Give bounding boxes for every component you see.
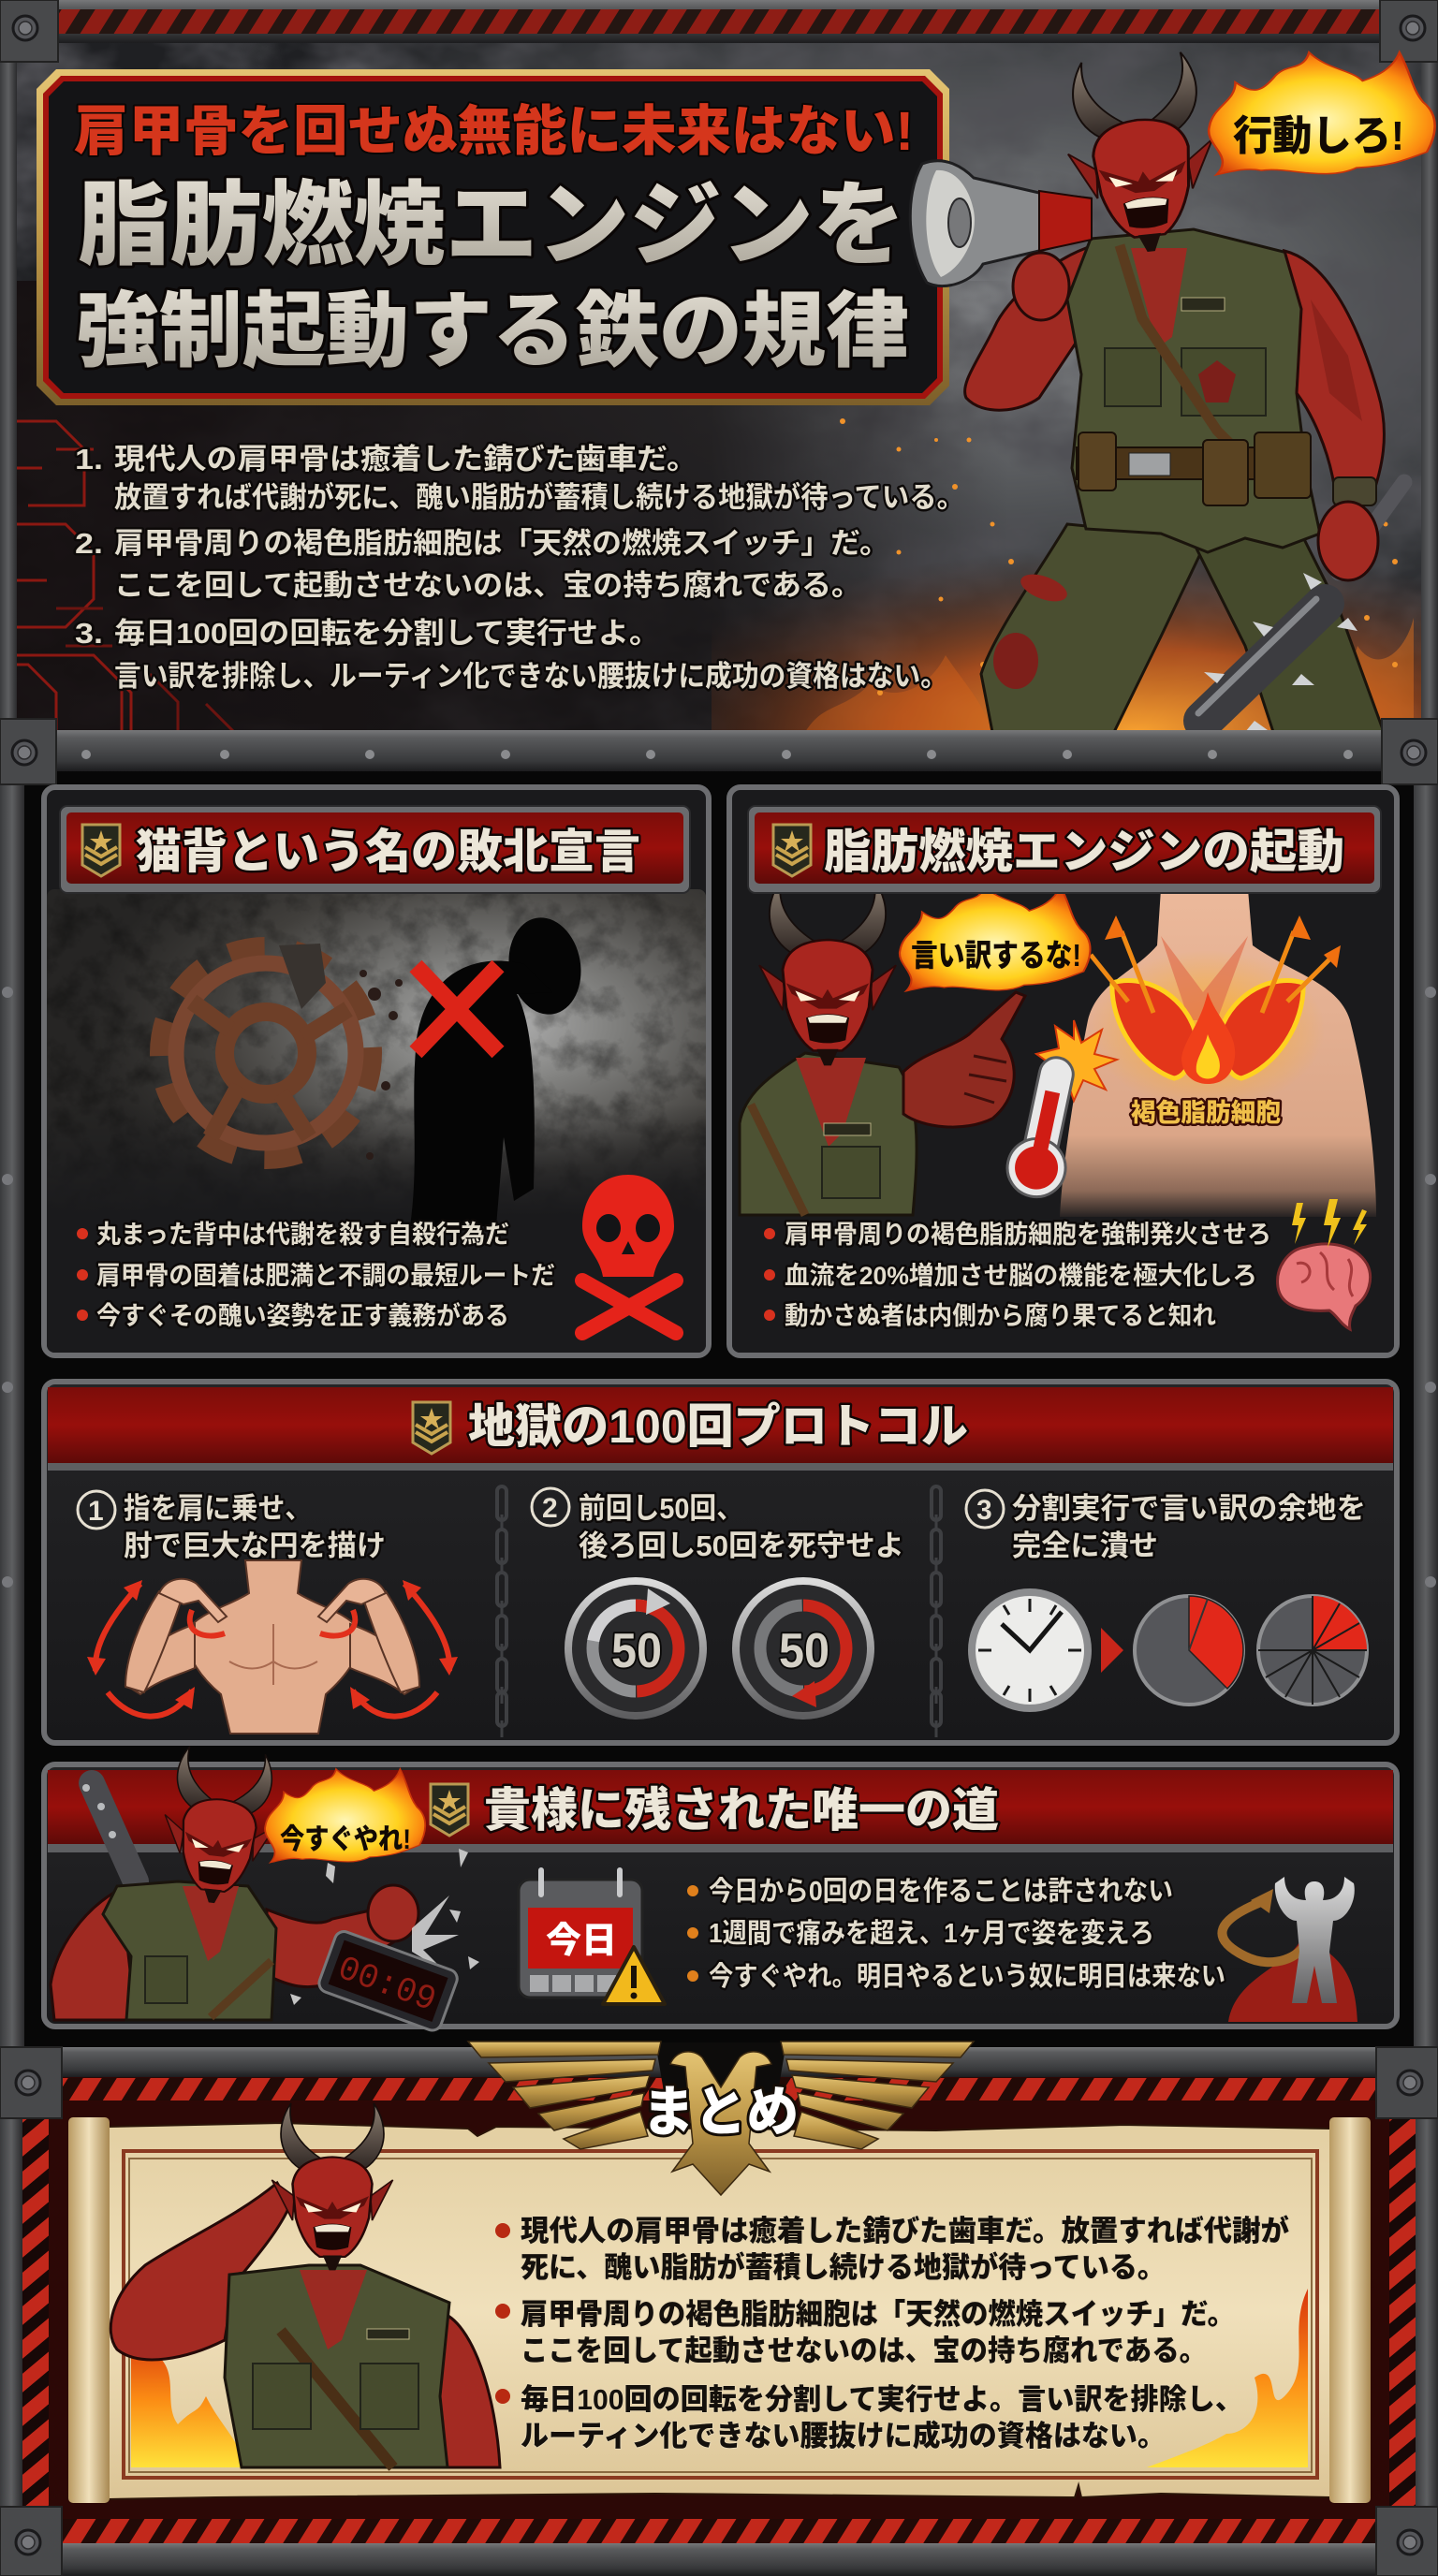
bullet list (687, 1876, 1225, 1992)
step 1: 1 (88, 1496, 104, 1527)
hero background (17, 43, 1421, 732)
bullet list: 今日から0回の日を作ることは許されない (709, 1876, 1173, 1907)
bullet list: 丸まった背中は代謝を殺す自殺行為だ (96, 1221, 509, 1249)
bullet list: 肩甲骨周りの褐色脂肪細胞を強制発火させろ (785, 1221, 1271, 1249)
title line: red: 肩甲骨を回せぬ無能に未来はない! (74, 101, 914, 162)
numbered key points (75, 443, 964, 693)
step 3: 3 (976, 1495, 992, 1526)
step 3 (966, 1490, 1367, 1708)
demon smashing alarm clock (51, 1745, 479, 2033)
bullet list: 今すぐやれ。明日やるという奴に明日は来ない (709, 1961, 1225, 1992)
flame speech bubble: no excuses: 言い訳するな! (911, 938, 1081, 973)
heading band (48, 1770, 1393, 1852)
panel: fat burning engine start (729, 787, 1397, 1355)
numbered key points: 1. (75, 443, 103, 476)
summary text: 現代人の肩甲骨は癒着した錆びた歯車だ。放置すれば代謝が (521, 2215, 1289, 2247)
step 1: 指を肩に乗せ、 (124, 1492, 312, 1525)
flame speech bubble: do it now: 今すぐやれ! (280, 1824, 411, 1855)
step 3: 完全に潰せ (1012, 1530, 1158, 1562)
numbered key points: 毎日100回の回転を分割して実行せよ。 (114, 617, 660, 650)
bullet list: 今すぐその醜い姿勢を正す義務がある (96, 1301, 509, 1330)
parchment scroll (68, 2117, 1371, 2503)
mid metal divider bar (0, 719, 1438, 784)
step 1 (78, 1491, 458, 1734)
title box (37, 69, 949, 405)
metal frame (0, 2047, 1438, 2576)
bullet list: 肩甲骨の固着は肥満と不調の最短ルートだ (96, 1262, 555, 1290)
heading (748, 806, 1381, 893)
bottom hazard stripes (58, 2519, 1380, 2543)
panel: hero (17, 43, 1421, 732)
heading band: 貴様に残された唯一の道 (484, 1784, 999, 1837)
heading band: 地獄の100回プロトコル (468, 1400, 968, 1453)
heading: 猫背という名の敗北宣言 (136, 826, 640, 878)
alarm clock showing 00:09 (316, 1929, 460, 2033)
side flames (131, 2289, 1308, 2467)
silhouette of hunched person (410, 912, 588, 1226)
top hazard stripes (58, 2078, 1380, 2100)
numbered key points: 放置すれば代謝が死に、醜い脂肪が蓄積し続ける地獄が待っている。 (114, 481, 964, 514)
step 1: 肘で巨大な円を描け (124, 1530, 386, 1562)
step 2: 後ろ回し50回を死守せよ (579, 1530, 904, 1562)
side hazard stripes (22, 2117, 1416, 2510)
summary text: ここを回して起動させないのは、宝の持ち腐れである。 (521, 2334, 1207, 2367)
title line 3: 強制起動する鉄の規律 (76, 285, 909, 377)
step 2: 前回し50回、 (579, 1492, 743, 1525)
red X mark (416, 966, 498, 1052)
road and muscular silhouette (1222, 1877, 1357, 2022)
dial: forward 50 (568, 1581, 703, 1716)
heading (60, 806, 690, 893)
pie: single block (1135, 1596, 1243, 1705)
hero demon with megaphone and club (910, 50, 1404, 732)
gold eagle emblem (468, 2042, 974, 2195)
summary text: ルーティン化できない腰抜けに成功の資格はない。 (521, 2420, 1166, 2452)
bullet list (77, 1221, 555, 1330)
numbered key points: ここを回して起動させないのは、宝の持ち腐れである。 (114, 569, 861, 602)
summary text: 肩甲骨周りの褐色脂肪細胞は「天然の燃焼スイッチ」だ。 (521, 2298, 1235, 2331)
badge icon (413, 1402, 450, 1454)
heading band (48, 1387, 1393, 1471)
demon pointing (740, 880, 1025, 1215)
flame speech bubble: act now (1209, 52, 1435, 175)
dial: backward 50 (736, 1581, 871, 1716)
icon: skull and crossbones (582, 1175, 676, 1333)
flame speech bubble: do it now (265, 1769, 425, 1863)
icon: brain with lightning (1278, 1199, 1371, 1329)
panel: hell 100 reps protocol (44, 1382, 1397, 1743)
summary text: 死に、醜い脂肪が蓄積し続ける地獄が待っている。 (521, 2251, 1166, 2284)
numbered key points: 肩甲骨周りの褐色脂肪細胞は「天然の燃焼スイッチ」だ。 (114, 527, 889, 560)
dial: forward 50: 50 (611, 1624, 662, 1678)
numbered key points: 2. (75, 527, 103, 560)
icon: calendar with today: 今日 (546, 1922, 617, 1961)
arrow (1101, 1628, 1123, 1673)
numbered key points: 現代人の肩甲骨は癒着した錆びた歯車だ。 (114, 443, 697, 476)
chain divider (497, 1486, 506, 1737)
step 3: 分割実行で言い訳の余地を (1012, 1492, 1366, 1525)
bullet list: 動かさぬ者は内側から腐り果てると知れ (785, 1302, 1216, 1330)
badge icon (82, 825, 120, 876)
badge icon (431, 1784, 468, 1836)
icon: clock (972, 1592, 1088, 1708)
pie: split blocks (1258, 1596, 1367, 1705)
back with brown fat illustration (732, 889, 1394, 1353)
bullet list: 1週間で痛みを超え、1ヶ月で姿を変えろ (709, 1918, 1154, 1949)
step 2: 2 (542, 1493, 558, 1524)
dial: backward 50: 50 (779, 1624, 829, 1678)
flame speech bubble: no excuses (900, 886, 1090, 991)
icon: rusty broken gear (167, 944, 403, 1160)
thermometer icon (1002, 1020, 1117, 1202)
dark red backdrop (49, 2076, 1389, 2520)
badge icon (773, 825, 811, 876)
panel: hunched posture defeat (44, 787, 709, 1355)
chain divider (932, 1486, 941, 1737)
heading: 脂肪燃焼エンジンの起動 (824, 826, 1344, 878)
bullet list: 血流を20%増加させ脳の機能を極大化しろ (785, 1262, 1257, 1290)
title line 2: 脂肪燃焼エンジンを (78, 173, 905, 276)
circuit lines (17, 421, 234, 732)
summary section (0, 2042, 1438, 2576)
numbered key points: 3. (75, 617, 103, 650)
step 2 (532, 1488, 904, 1716)
saluting demon (110, 2103, 500, 2467)
summary label: まとめ (642, 2082, 799, 2143)
side frame rails (0, 732, 1438, 2052)
flame speech bubble: act now: 行動しろ! (1233, 113, 1404, 159)
top metal frame with hazard stripes (0, 0, 1438, 732)
alarm clock showing 00:09: 00:09 (332, 1950, 441, 2021)
label: brown fat cells: 褐色脂肪細胞 (1131, 1099, 1281, 1127)
torso with arm-circle arrows (87, 1560, 458, 1734)
bullet list (764, 1221, 1271, 1330)
panel: the only road left (44, 1745, 1397, 2033)
numbered key points: 言い訳を排除し、ルーティン化できない腰抜けに成功の資格はない。 (114, 660, 947, 693)
summary text (495, 2215, 1289, 2452)
summary text: 毎日100回の回転を分割して実行せよ。言い訳を排除し、 (521, 2383, 1243, 2416)
warning triangle (603, 1947, 665, 2004)
icon: calendar with today (519, 1870, 665, 2004)
grunge wall background (47, 889, 706, 1353)
